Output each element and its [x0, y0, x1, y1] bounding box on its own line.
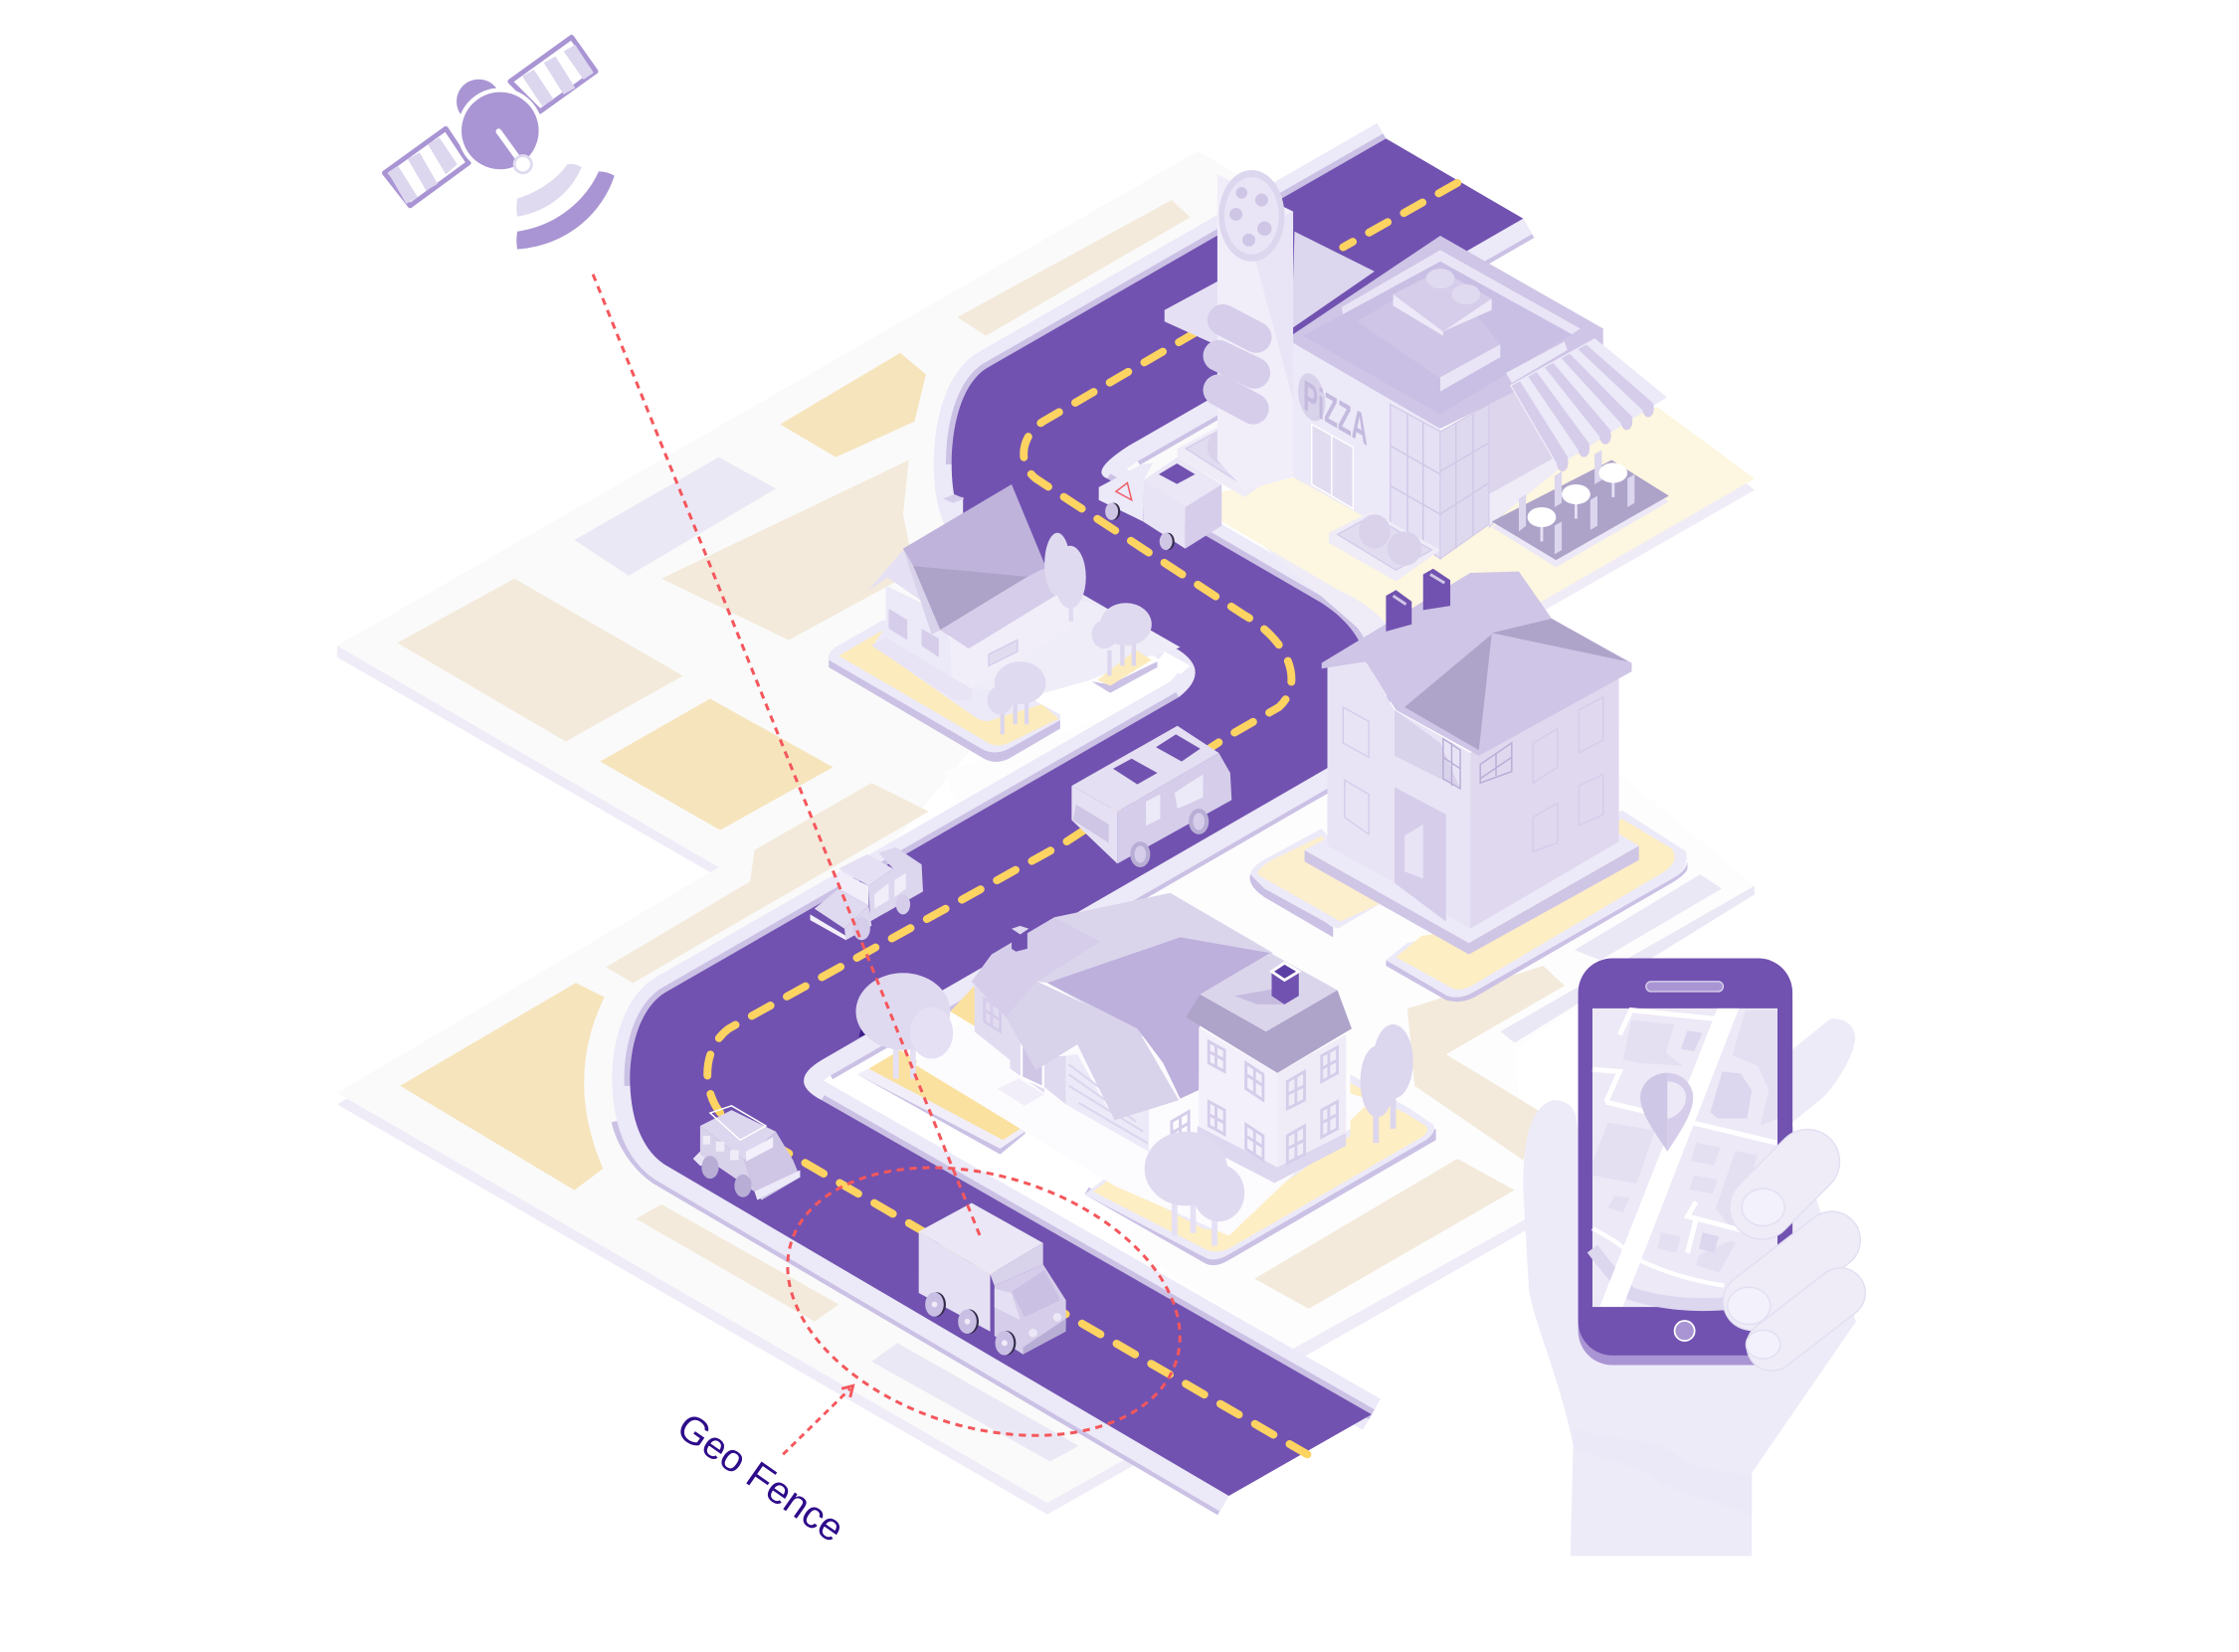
pizza plot — [1214, 407, 1755, 671]
right glass wall — [1489, 357, 1586, 528]
right house plot — [1250, 810, 1688, 1002]
tower windows — [985, 999, 1338, 1163]
kerbs — [630, 138, 1523, 1496]
geo fence label: Geo Fence — [669, 1405, 851, 1551]
big house trees — [855, 973, 1413, 1246]
map base — [337, 151, 1755, 1515]
garage — [1066, 1054, 1149, 1152]
big house — [914, 893, 1372, 1236]
truck wheels — [925, 1292, 1016, 1355]
door — [998, 1038, 1044, 1106]
phone — [1579, 958, 1792, 1366]
truck — [919, 1203, 1066, 1355]
gable — [867, 550, 924, 603]
fingernails — [1728, 1189, 1784, 1359]
small garden bed — [1091, 650, 1158, 693]
pickup — [811, 847, 923, 940]
map blocks — [397, 200, 1755, 1462]
awning — [1506, 340, 1665, 471]
sign tower — [1217, 170, 1293, 490]
left solar panel — [384, 128, 468, 206]
palm — [1523, 1018, 1856, 1556]
terrace — [1492, 450, 1669, 567]
door — [1312, 425, 1353, 508]
rooftop unit — [1394, 269, 1492, 336]
road — [630, 138, 1523, 1496]
windows — [1343, 697, 1603, 851]
house shadow — [972, 597, 1181, 693]
road centre dashes — [707, 183, 1457, 1454]
location pin — [1640, 1073, 1693, 1152]
sign canopy and shadow — [1165, 232, 1375, 371]
glass corner — [1391, 405, 1489, 559]
pizza disc — [1218, 170, 1284, 262]
entrance — [1395, 787, 1446, 922]
jeep — [693, 1106, 800, 1200]
phone screen map — [1592, 1009, 1777, 1307]
roof — [1293, 236, 1603, 429]
right house — [1305, 569, 1639, 955]
delivery van — [1099, 458, 1221, 550]
gps signal line — [593, 275, 982, 1240]
satellite — [384, 37, 615, 250]
house one plot — [829, 597, 1191, 762]
tower walls — [1199, 1027, 1277, 1168]
geofence — [754, 1123, 1213, 1481]
roofs — [972, 893, 1273, 1057]
chimneys — [1386, 569, 1450, 632]
fingers — [1728, 1162, 1840, 1359]
planter left — [1178, 428, 1287, 497]
sign capsules — [1218, 320, 1256, 409]
front planter — [1329, 511, 1440, 582]
left wall — [1293, 334, 1440, 559]
white ground — [914, 986, 1372, 1236]
dish — [457, 80, 501, 123]
big house plot — [857, 1021, 1436, 1265]
chimney — [943, 494, 965, 523]
right solar panel — [510, 37, 596, 111]
house one trees — [988, 533, 1152, 734]
windows — [889, 609, 1018, 665]
house one — [867, 484, 1152, 734]
hand and phone — [1523, 958, 1856, 1556]
wing walls — [975, 986, 1011, 1060]
main roof — [1322, 572, 1631, 756]
roof — [903, 484, 1046, 577]
signal waves — [516, 164, 582, 217]
house walls — [886, 586, 952, 680]
geofence arrow — [783, 1385, 853, 1454]
rv — [1071, 726, 1231, 867]
pizza restaurant — [1165, 170, 1669, 582]
chimneys — [1012, 926, 1299, 1005]
pizza lettering: PiZZA — [1303, 370, 1368, 456]
